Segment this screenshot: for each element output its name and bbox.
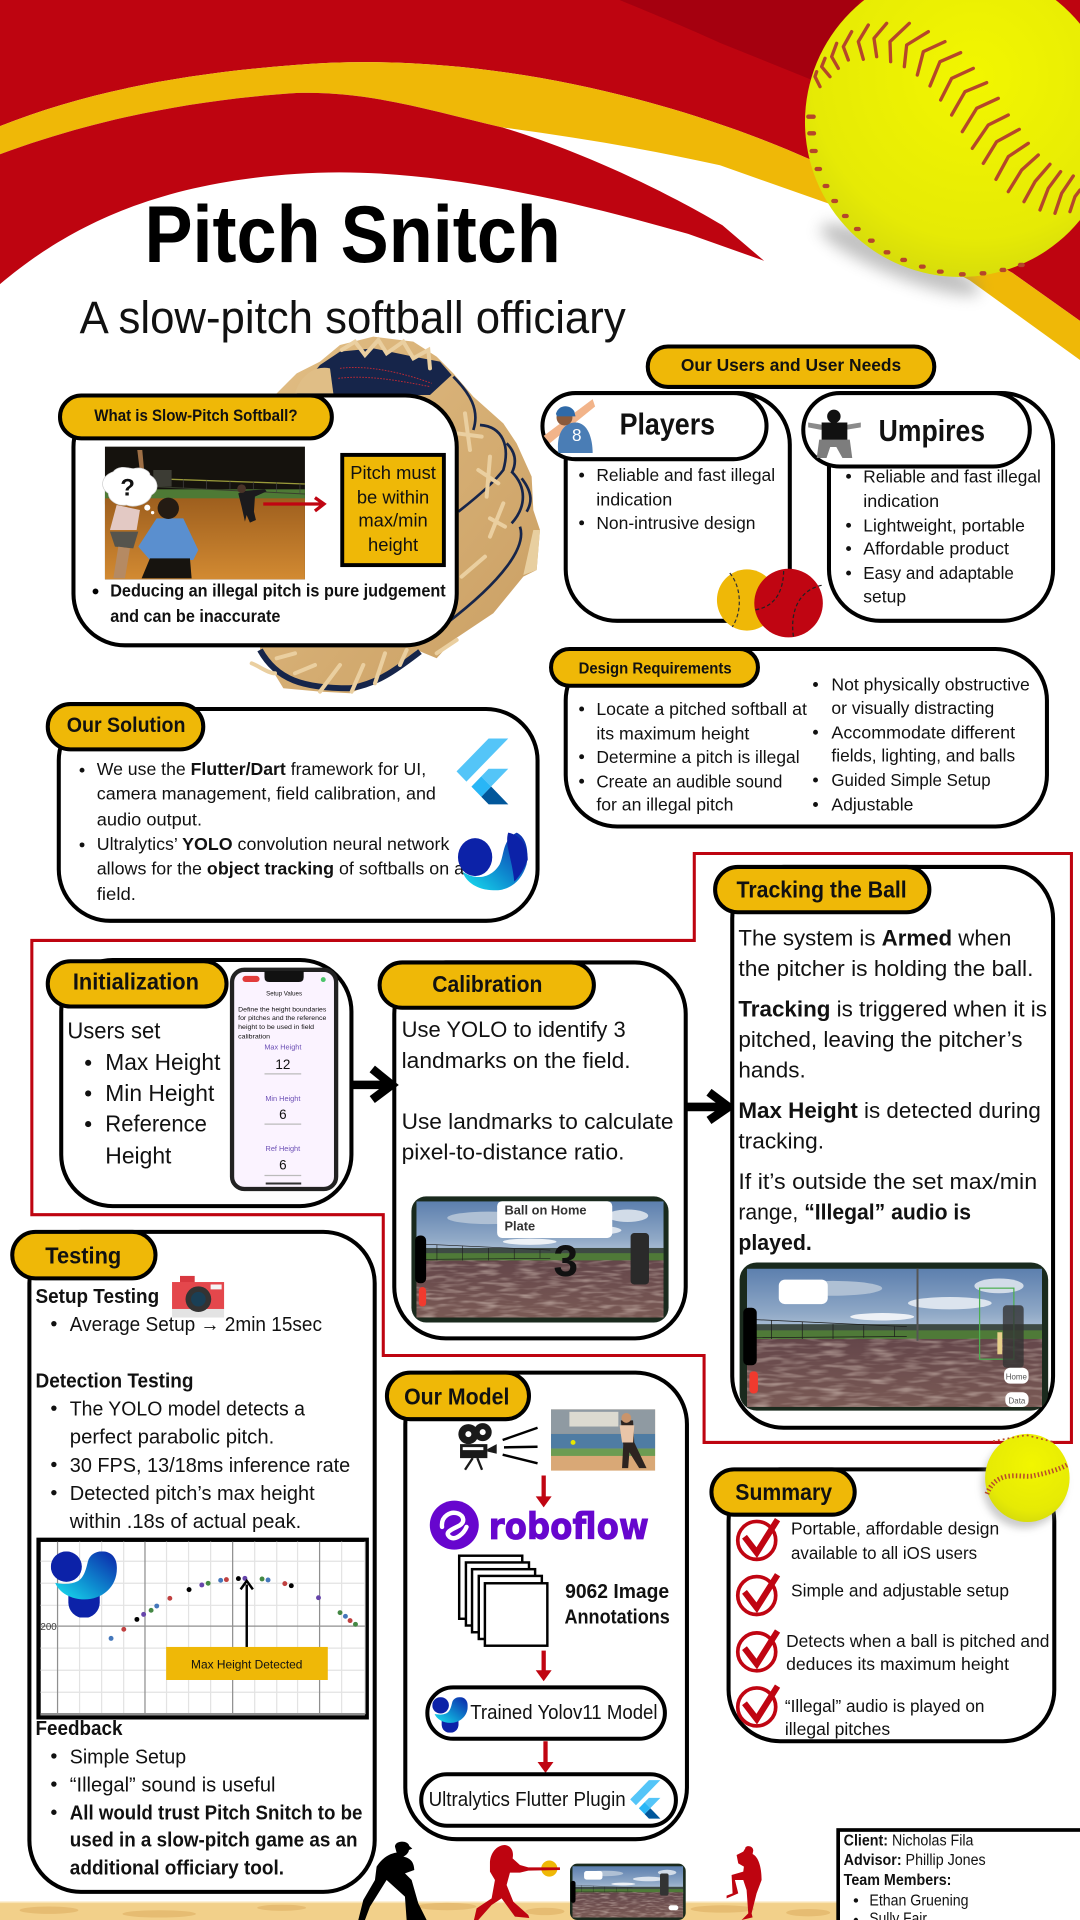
callout: pitch must be within: Pitch must	[350, 462, 436, 483]
silhouette: pitcher	[727, 1846, 762, 1920]
list: player needs: Reliable and fast illegal	[596, 465, 775, 485]
phone: setup values screen: 6	[279, 1157, 287, 1172]
list: umpire needs: Reliable and fast illegal	[863, 466, 1041, 486]
text: detection testing: perfect parabolic pitch.	[70, 1427, 274, 1449]
title: Pitch Snitch	[144, 190, 561, 280]
list: non-functional requirements: Accommodate different	[831, 722, 1015, 742]
arrow: to roboflow	[536, 1476, 552, 1507]
text: solution bullets: allows for the object tracking of softballs on a	[97, 858, 464, 878]
list: non-functional requirements: or visually distracting	[831, 698, 994, 718]
heading pill: our model: Our Model	[404, 1383, 509, 1409]
text: users set list: Height	[105, 1142, 172, 1168]
text: detection testing: 30 FPS, 13/18ms inference rate	[70, 1455, 350, 1477]
text: summary points: available to all iOS users	[791, 1543, 977, 1563]
icon: batter: 8	[572, 425, 582, 445]
panel: credits	[838, 1830, 1080, 1920]
heading pill: tracking the ball: Tracking the Ball	[737, 877, 907, 903]
text: solution bullets: We use the Flutter/Dart framework for UI,	[97, 759, 426, 779]
text: client, advisor and team: Advisor: Phillip Jones	[844, 1852, 986, 1869]
text: tracking description: played.	[738, 1230, 812, 1255]
phone: setup values screen: Define the height boundaries	[238, 1006, 326, 1013]
text: setup testing	[36, 1286, 322, 1336]
icon: image annotation stack	[459, 1556, 547, 1646]
text: setup testing: Average Setup → 2min 15sec	[70, 1314, 322, 1336]
text: tracking description: range, “Illegal” audio is	[738, 1200, 971, 1225]
panel: testing	[12, 1232, 375, 1892]
arrow: initialization to calibration	[351, 1069, 392, 1100]
text: solution bullets: field.	[97, 884, 136, 904]
subtitle: A slow-pitch softball officiary	[80, 292, 626, 343]
text: image annotations count: 9062 Image	[565, 1581, 669, 1603]
heading pill: summary: Summary	[735, 1479, 832, 1505]
heading pill: initialization: Initialization	[73, 968, 199, 994]
list: functional requirements: for an illegal pitch	[596, 795, 733, 815]
list: non-functional requirements: Adjustable	[831, 795, 914, 815]
text: solution bullets: camera management, field calibration, and	[97, 784, 436, 804]
icon: umpire	[808, 410, 861, 458]
text: client, advisor and team: Client: Nicholas Fila	[844, 1832, 974, 1849]
pill: trained yolov11 model	[427, 1687, 665, 1739]
callout: pitch must be within: max/min	[358, 510, 428, 531]
heading pill: what is slow-pitch: What is Slow-Pitch Softball?	[94, 406, 298, 425]
panel: umpires	[803, 393, 1053, 621]
baseball glove	[252, 337, 540, 693]
text: tracking description: Max Height is detected during	[738, 1098, 1041, 1123]
heading pill: our model	[387, 1373, 529, 1419]
text: users set list	[67, 1017, 221, 1168]
list: umpire needs: Lightweight, portable	[863, 515, 1025, 535]
heading pill: summary	[711, 1469, 855, 1515]
heading pill: calibration	[380, 962, 594, 1008]
text: solution bullets: Ultralytics’ YOLO convolution neural network	[97, 834, 450, 854]
logo: roboflow	[430, 1501, 649, 1550]
heading pill: tracking the ball	[715, 867, 929, 912]
text: summary points: illegal pitches	[785, 1719, 890, 1739]
list: non-functional requirements: Guided Simple Setup	[831, 770, 991, 790]
text: detection testing: within .18s of actual peak.	[69, 1511, 301, 1533]
heading pill: design requirements: Design Requirements	[579, 660, 732, 677]
phone: tracking screenshot	[740, 1262, 1048, 1411]
text: setup testing: Setup Testing	[36, 1286, 159, 1308]
phone: setup values screen: calibration	[238, 1033, 270, 1040]
panel: summary	[711, 1469, 1054, 1741]
text: summary points: Detects when a ball is pitched and	[786, 1631, 1049, 1651]
list: player needs: indication	[596, 490, 672, 510]
phone: setup values screen: for pitches and the reference	[238, 1015, 327, 1022]
text: feedback	[36, 1718, 362, 1880]
phone: calibration screenshot: Ball on Home	[504, 1203, 587, 1218]
text: client, advisor and team: Team Members:	[844, 1872, 951, 1889]
icon: flutter logo	[457, 738, 508, 804]
callout: pitch must be within: height	[368, 534, 418, 555]
text: tracking description: pitched, leaving the pitcher’s	[738, 1027, 1022, 1052]
heading pill: testing	[12, 1232, 156, 1278]
panel: design requirements	[551, 649, 1047, 827]
text: image annotations count	[564, 1581, 670, 1629]
panel: calibration	[380, 962, 686, 1338]
panel: our model	[387, 1373, 687, 1839]
text: detection testing: Detected pitch’s max height	[70, 1483, 315, 1505]
panel: initialization	[48, 960, 351, 1206]
list: non-functional requirements: Not physically obstructive	[831, 675, 1030, 695]
icon: camera	[172, 1276, 224, 1318]
text: feedback: used in a slow-pitch game as an	[70, 1830, 358, 1852]
heading: players	[542, 393, 767, 459]
silhouette: batter	[474, 1845, 560, 1920]
text: solution bullets	[80, 759, 464, 904]
icon: yolo logo	[458, 833, 528, 890]
text: summary points: Simple and adjustable setup	[791, 1581, 1009, 1601]
text: tracking description: Tracking is triggered when it is	[738, 996, 1047, 1021]
phone: calibration screenshot: 3	[553, 1237, 578, 1286]
text: image annotations count: Annotations	[564, 1607, 670, 1629]
phone: setup values screen: Max Height	[264, 1042, 301, 1051]
callout: pitch must be within	[342, 455, 444, 565]
bullet: deducing an illegal pitch: Deducing an illegal pitch is pure judgement	[110, 580, 446, 600]
trajectory dots	[109, 1576, 358, 1641]
arrow: to flutter plugin	[538, 1741, 553, 1773]
icon: small softball	[982, 1434, 1070, 1528]
silhouette: umpire	[358, 1842, 427, 1920]
text: detection testing	[36, 1370, 350, 1533]
ground: sand strip	[0, 1902, 1080, 1920]
arrow: to trained model	[536, 1651, 552, 1681]
phone: small screenshot	[570, 1864, 686, 1920]
text: calibration steps: landmarks on the field.	[402, 1048, 631, 1073]
phone: tracking screenshot: Data	[1009, 1396, 1026, 1405]
heading pill: our users and user needs	[648, 347, 934, 387]
chart: pitch trajectory with max height	[39, 1540, 367, 1717]
list: non-functional requirements: fields, lighting, and balls	[831, 746, 1015, 766]
icon: yellow ball at bat	[541, 1860, 557, 1877]
heading pill: our users and user needs: Our Users and User Needs	[681, 355, 901, 375]
list: functional requirements: Locate a pitched softball at	[596, 699, 807, 719]
panel: our solution	[48, 704, 538, 921]
text: summary points: deduces its maximum height	[786, 1654, 1009, 1674]
logo: roboflow: roboflow	[489, 1505, 649, 1548]
softball graphic top right	[805, 0, 1080, 308]
photo: umpire and pitcher at night	[103, 447, 324, 579]
icon: yolo logo on chart	[51, 1551, 117, 1618]
text: tracking description	[738, 925, 1047, 1255]
list: player needs	[579, 465, 775, 533]
text: feedback: All would trust Pitch Snitch to be	[70, 1803, 362, 1825]
photo: pitcher	[551, 1409, 655, 1471]
phone: setup values screen	[232, 970, 336, 1189]
list: player needs: Non-intrusive design	[596, 513, 756, 533]
label: max height detected: Max Height Detected	[191, 1657, 303, 1671]
arrow: calibration to tracking	[686, 1092, 729, 1120]
list: umpire needs: Easy and adaptable	[863, 563, 1014, 583]
red process outline	[32, 853, 1071, 1442]
list: umpire needs: indication	[863, 491, 939, 511]
heading pill: testing: Testing	[45, 1243, 121, 1269]
heading: players: Players	[620, 408, 715, 442]
photo: umpire and pitcher at night: ?	[120, 475, 135, 502]
text: client, advisor and team	[844, 1832, 986, 1920]
phone: setup values screen: height to be used in field	[238, 1024, 315, 1031]
heading: umpires: Umpires	[879, 414, 985, 448]
label: max height detected	[166, 1647, 328, 1680]
text: calibration steps: Use YOLO to identify 3	[402, 1017, 626, 1042]
list: functional requirements: Determine a pitch is illegal	[596, 747, 800, 767]
list: functional requirements: its maximum height	[596, 724, 749, 744]
list: non-functional requirements	[813, 675, 1030, 815]
icon: checkmarks	[738, 1520, 778, 1726]
phone: setup values screen: 12	[275, 1057, 290, 1072]
panel: what is slow-pitch softball	[60, 396, 457, 645]
chart: pitch trajectory with max height: 200	[40, 1622, 57, 1633]
phone: setup values screen: Min Height	[265, 1094, 300, 1103]
pill: trained yolov11 model: Trained Yolov11 Model	[470, 1702, 658, 1724]
list: functional requirements: Create an audible sound	[596, 771, 782, 791]
text: calibration steps: Use landmarks to calculate	[402, 1109, 673, 1134]
text: summary points	[785, 1518, 1049, 1739]
arrow: max height pointer	[241, 1581, 253, 1648]
icon: yellow and red softballs	[717, 569, 823, 637]
text: tracking description: hands.	[738, 1058, 806, 1083]
heading pill: calibration: Calibration	[432, 971, 542, 997]
phone: setup values screen: 6	[279, 1107, 287, 1122]
phone: setup values screen: Setup Values	[266, 991, 302, 998]
text: detection testing: The YOLO model detects a	[70, 1399, 306, 1421]
list: umpire needs: Affordable product	[863, 539, 1009, 559]
phone: tracking screenshot: Home	[1006, 1372, 1027, 1381]
phone: calibration screenshot: Plate	[504, 1219, 535, 1234]
text: detection testing: Detection Testing	[36, 1370, 193, 1392]
text: tracking description: tracking.	[738, 1129, 824, 1154]
text: summary points: Portable, affordable design	[791, 1518, 999, 1538]
text: calibration steps: pixel-to-distance ratio.	[402, 1140, 624, 1165]
text: users set list: Max Height	[105, 1049, 221, 1075]
panel: tracking the ball	[715, 867, 1053, 1428]
heading: umpires	[803, 393, 1030, 467]
pill: ultralytics flutter plugin	[421, 1774, 676, 1826]
text: feedback: “Illegal” sound is useful	[70, 1774, 276, 1796]
list: functional requirements	[579, 699, 807, 815]
list: umpire needs: setup	[863, 586, 906, 606]
text: users set list: Users set	[67, 1017, 161, 1043]
bullet: deducing an illegal pitch	[93, 580, 446, 626]
text: feedback: additional officiary tool.	[70, 1858, 284, 1880]
text: feedback: Feedback	[36, 1718, 123, 1740]
icon: movie camera	[458, 1423, 497, 1470]
heading pill: design requirements	[551, 649, 758, 686]
phone: calibration screenshot	[411, 1196, 669, 1322]
text: solution bullets: audio output.	[97, 809, 202, 829]
list: umpire needs	[846, 466, 1041, 606]
callout: pitch must be within: be within	[357, 486, 429, 507]
panel: players	[542, 393, 790, 621]
text: users set list: Reference	[105, 1110, 207, 1136]
heading pill: what is slow-pitch	[60, 396, 332, 438]
heading pill: our solution: Our Solution	[67, 713, 186, 737]
phone: setup values screen: Ref Height	[266, 1144, 300, 1153]
text: calibration steps	[402, 1017, 673, 1165]
text: tracking description: The system is Armed when	[738, 925, 1011, 950]
text: summary points: “Illegal” audio is played on	[785, 1696, 984, 1716]
text: users set list: Min Height	[105, 1080, 215, 1106]
text: tracking description: the pitcher is holding the ball.	[738, 956, 1033, 981]
heading pill: our solution	[48, 704, 203, 749]
icon: batter	[544, 399, 595, 453]
heading pill: initialization	[48, 961, 227, 1007]
text: client, advisor and team: Ethan Gruening	[869, 1892, 969, 1909]
bullet: deducing an illegal pitch: and can be inaccurate	[110, 606, 281, 626]
icon: capture lines	[503, 1428, 538, 1463]
pill: ultralytics flutter plugin: Ultralytics Flutter Plugin	[429, 1789, 626, 1811]
text: tracking description: If it’s outside the set max/min	[738, 1169, 1037, 1194]
text: feedback: Simple Setup	[70, 1746, 186, 1768]
